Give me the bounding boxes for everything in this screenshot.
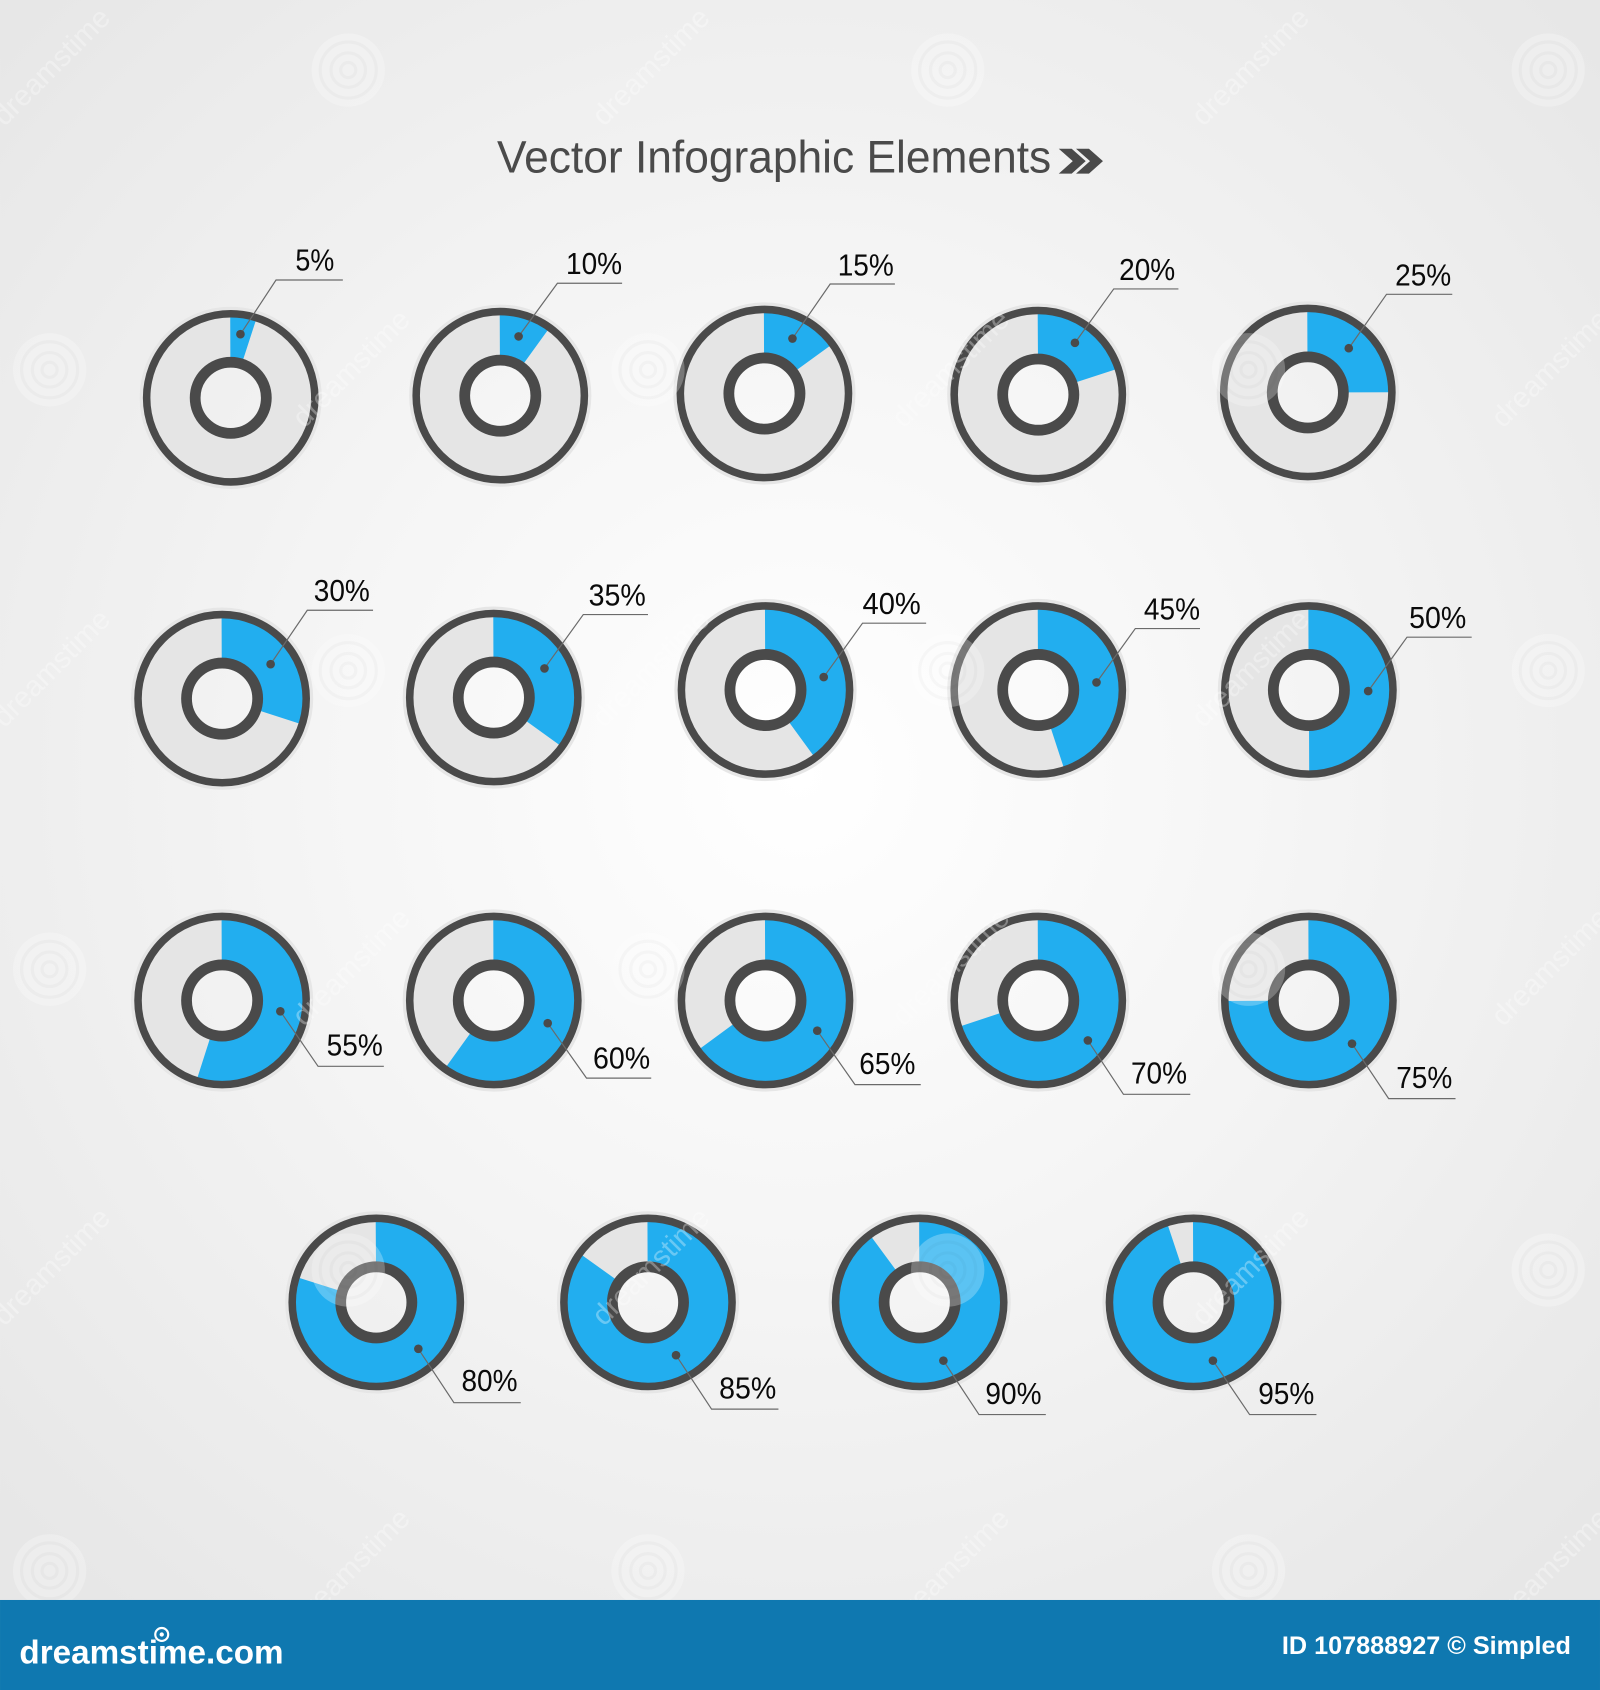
donut chart: 65%: [677, 912, 921, 1089]
watermark text: dreamstime: [287, 304, 417, 434]
donut chart: 45%: 45%: [1144, 593, 1200, 626]
donut chart: 90%: [831, 1214, 1046, 1415]
watermark text: dreamstime: [1186, 2, 1316, 132]
footer bar: [0, 1600, 1600, 1690]
donut chart: 85%: 85%: [719, 1372, 776, 1405]
watermark text: dreamstime: [586, 603, 716, 734]
donut chart: 35%: 35%: [589, 579, 646, 612]
footer image id and credit: ID 107888927 © Simpled: [1282, 1632, 1571, 1660]
donut chart: 65%: 65%: [859, 1048, 915, 1081]
donut chart: 5%: 5%: [295, 245, 334, 278]
donut chart: 40%: 40%: [863, 588, 921, 621]
icon: double chevron arrow: [1059, 149, 1103, 174]
donut chart: 10%: 10%: [566, 248, 622, 281]
watermark text: dreamstime: [1186, 603, 1316, 734]
donut chart: 40%: [677, 588, 926, 778]
watermark text: dreamstime: [586, 1202, 716, 1332]
donut chart: 50%: 50%: [1409, 602, 1466, 635]
watermark text: dreamstime: [1186, 1202, 1316, 1332]
donut chart: 80%: 80%: [461, 1365, 518, 1398]
donut chart: 60%: 60%: [593, 1042, 650, 1075]
footer logo: dreamstime.com: [19, 1635, 284, 1672]
donut chart: 95%: 95%: [1258, 1378, 1314, 1411]
watermark text: dreamstime: [886, 1503, 1016, 1633]
donut chart: 45%: [950, 593, 1200, 778]
donut chart: 70%: 70%: [1131, 1058, 1187, 1091]
donut chart: 75%: [1220, 912, 1456, 1099]
donut chart: 25%: 25%: [1395, 260, 1451, 293]
donut chart: 50%: [1220, 602, 1472, 778]
donut chart: 85%: [560, 1214, 778, 1409]
donut chart: 75%: 75%: [1396, 1062, 1452, 1095]
donut chart: 95%: [1105, 1214, 1316, 1415]
watermark text: dreamstime: [287, 1503, 417, 1633]
donut chart: 20%: 20%: [1119, 254, 1175, 287]
title: Vector Infographic Elements: [497, 132, 1051, 183]
donut chart: 20%: [950, 254, 1178, 483]
donut chart: 30%: [134, 575, 373, 787]
watermark text: dreamstime: [287, 902, 417, 1032]
donut chart: 70%: [950, 912, 1190, 1094]
donut chart: 80%: [288, 1214, 521, 1403]
watermark text: dreamstime: [886, 902, 1016, 1032]
donut chart: 5%: [142, 245, 343, 486]
donut chart: 30%: 30%: [314, 575, 370, 608]
donut chart: 55%: 55%: [327, 1030, 383, 1063]
donut chart: 60%: [405, 912, 651, 1089]
donut chart: 90%: 90%: [985, 1378, 1042, 1411]
donut chart: 15%: 15%: [838, 249, 894, 282]
donut chart: 35%: [405, 579, 648, 786]
donut chart: 10%: [412, 248, 622, 484]
watermark text: dreamstime: [886, 304, 1016, 434]
watermark text: dreamstime: [586, 2, 716, 132]
donut chart: 55%: [134, 912, 384, 1089]
donut chart: 25%: [1219, 260, 1452, 481]
donut chart: 15%: [676, 249, 895, 482]
